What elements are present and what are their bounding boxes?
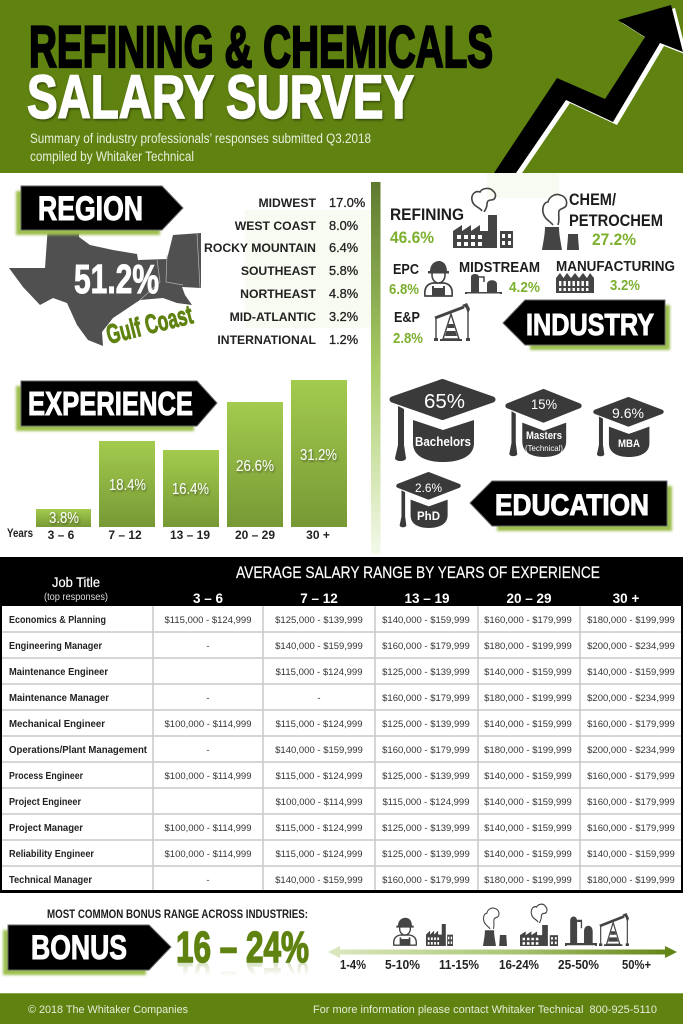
scale labels: 50%+ — [622, 958, 651, 972]
table header: 3 – 6 — [193, 591, 224, 606]
row: project manager: $140,000 - $159,999 — [484, 823, 572, 834]
row: project engineer: $115,000 - $124,999 — [383, 797, 469, 808]
row: maintenance engineer: $140,000 - $159,999 — [484, 667, 572, 678]
panel: experience — [7, 380, 347, 542]
chem / petrochem: CHEM/ — [569, 190, 616, 209]
axis labels: Years — [7, 528, 33, 540]
subtitle: compiled by Whitaker Technical — [30, 149, 194, 164]
mba cap — [595, 399, 662, 457]
row: mechanical engineer: $125,000 - $139,999 — [382, 719, 470, 730]
mba cap: MBA — [618, 438, 640, 450]
row: engineering manager: Engineering Manager — [9, 641, 102, 652]
region list: WEST COAST — [235, 219, 317, 233]
epc: 6.8% — [389, 281, 419, 298]
masters cap — [508, 391, 579, 457]
bar 20-29 — [227, 402, 283, 527]
refining: 46.6% — [390, 228, 434, 247]
row: process engineer: $100,000 - $114,999 — [165, 771, 251, 782]
row: operations plant management: Operations/Plant Management — [9, 745, 148, 756]
epc: EPC — [393, 262, 419, 278]
table header: Job Title — [52, 574, 100, 590]
region list: INTERNATIONAL — [217, 333, 317, 347]
region list: MID-ATLANTIC — [230, 310, 316, 324]
table header: 30 + — [613, 591, 639, 606]
bonus range value: 16 – 24% — [176, 923, 309, 972]
experience badge: EXPERIENCE — [28, 385, 193, 422]
masters cap: Masters — [526, 430, 562, 442]
bachelors cap: 65% — [424, 391, 465, 413]
icon row — [394, 904, 629, 946]
masters cap: (Technical) — [525, 443, 563, 453]
row: mechanical engineer: $115,000 - $124,999 — [276, 719, 362, 730]
row: technical manager — [9, 875, 675, 886]
bonus range value — [176, 923, 309, 1001]
axis labels: 3 – 6 — [48, 528, 75, 542]
row: project manager: $125,000 - $139,999 — [382, 823, 470, 834]
panel: industry — [389, 188, 675, 350]
row: reliability engineer — [9, 849, 675, 860]
region list: NORTHEAST — [240, 287, 317, 301]
e&p: E&P — [394, 310, 420, 326]
table header — [44, 563, 639, 606]
scale labels: 1-4% — [340, 958, 366, 972]
row: maintenance manager: $160,000 - $179,999 — [382, 693, 470, 704]
row: operations plant management: $200,000 - $234,999 — [587, 745, 675, 756]
row: economics and planning: $160,000 - $179,999 — [484, 615, 572, 626]
bar 13-19: 16.4% — [172, 481, 209, 498]
row: project manager: $115,000 - $124,999 — [276, 823, 362, 834]
row: technical manager: $160,000 - $179,999 — [382, 875, 470, 886]
phd cap: 2.6% — [415, 481, 442, 495]
region list: 8.0% — [329, 218, 358, 233]
region list: 17.0% — [329, 195, 365, 210]
row: maintenance engineer: $115,000 - $124,999 — [276, 667, 362, 678]
row: project manager: $160,000 - $179,999 — [587, 823, 675, 834]
row: operations plant management: $160,000 - $179,999 — [382, 745, 470, 756]
manufacturing: 3.2% — [610, 277, 640, 294]
chem / petrochem: PETROCHEM — [569, 211, 663, 230]
panel: bonus — [3, 904, 677, 1001]
chem / petrochem — [542, 190, 663, 250]
title: salary survey: SALARY SURVEY — [27, 63, 414, 131]
row: engineering manager: $140,000 - $159,999 — [275, 641, 363, 652]
row: operations plant management — [9, 745, 675, 756]
row: mechanical engineer: $100,000 - $114,999 — [165, 719, 251, 730]
row: reliability engineer: Reliability Engineer — [9, 849, 94, 860]
row: project engineer — [9, 797, 675, 808]
row: mechanical engineer: $160,000 - $179,999 — [587, 719, 675, 730]
bar 30+: 31.2% — [300, 447, 337, 464]
bar 13-19 — [163, 450, 219, 527]
row: maintenance manager: $180,000 - $199,999 — [484, 693, 572, 704]
gulf coast label: Gulf Coast — [103, 299, 196, 350]
bar 20-29: 26.6% — [236, 458, 274, 475]
row: technical manager: $180,000 - $199,999 — [587, 875, 675, 886]
education badge — [470, 481, 672, 531]
axis labels — [7, 528, 330, 542]
row: economics and planning — [9, 615, 675, 626]
scale labels: 5-10% — [385, 958, 420, 972]
region list: MIDWEST — [258, 196, 317, 210]
table header: 7 – 12 — [300, 591, 338, 606]
table header: 20 – 29 — [506, 591, 552, 606]
centre divider — [371, 182, 380, 554]
row: process engineer: Process Engineer — [9, 771, 83, 782]
row: process engineer — [9, 771, 675, 782]
row: engineering manager: - — [206, 641, 210, 652]
row: economics and planning: Economics & Planning — [9, 615, 106, 626]
bonus badge — [3, 925, 171, 975]
table header: AVERAGE SALARY RANGE BY YEARS OF EXPERIENCE — [236, 563, 600, 582]
chem / petrochem: 27.2% — [592, 230, 636, 249]
bar 3-6: 3.8% — [49, 510, 79, 527]
midstream — [459, 260, 540, 296]
scale labels: 16-24% — [499, 958, 539, 972]
bachelors cap: Bachelors — [415, 434, 471, 449]
region list: ROCKY MOUNTAIN — [204, 241, 316, 255]
region list: 4.8% — [329, 286, 358, 301]
salary table — [0, 557, 683, 893]
midstream: 4.2% — [509, 279, 540, 296]
row: economics and planning: $180,000 - $199,999 — [587, 615, 675, 626]
industry badge — [503, 300, 670, 350]
row: process engineer: $160,000 - $179,999 — [587, 771, 675, 782]
row: maintenance engineer: $125,000 - $139,999 — [382, 667, 470, 678]
row: maintenance manager: - — [206, 693, 210, 704]
row: reliability engineer: $115,000 - $124,999 — [276, 849, 362, 860]
axis labels: 30 + — [306, 528, 330, 542]
footer: For more information please contact Whitaker Technical 800-925-5110 — [313, 1004, 657, 1016]
region badge — [16, 186, 183, 235]
bar 3-6 — [36, 509, 91, 527]
region badge: REGION — [38, 190, 143, 228]
row: operations plant management: $140,000 - $159,999 — [275, 745, 363, 756]
row: technical manager: Technical Manager — [9, 875, 92, 886]
region list: SOUTHEAST — [241, 264, 317, 278]
row: project engineer: $160,000 - $179,999 — [587, 797, 675, 808]
region list: 5.8% — [329, 263, 358, 278]
double-headed scale arrow — [328, 946, 677, 958]
region list: 3.2% — [329, 309, 358, 324]
industry badge: INDUSTRY — [526, 307, 654, 342]
row: engineering manager: $200,000 - $234,999 — [587, 641, 675, 652]
scale labels — [340, 958, 651, 972]
table header: 13 – 19 — [404, 591, 450, 606]
bar chart — [7, 380, 347, 542]
row: process engineer: $125,000 - $139,999 — [382, 771, 470, 782]
bonus badge: BONUS — [31, 929, 127, 967]
row: engineering manager: $180,000 - $199,999 — [484, 641, 572, 652]
bar 30+ — [291, 380, 347, 527]
icon: rising arrow — [494, 5, 683, 176]
refining — [390, 188, 513, 248]
row: maintenance manager: - — [317, 693, 321, 704]
row: maintenance engineer: Maintenance Engineer — [9, 667, 108, 678]
midstream: MIDSTREAM — [459, 260, 540, 276]
epc — [389, 261, 452, 298]
bar 7-12: 18.4% — [109, 477, 146, 494]
row: engineering manager: $160,000 - $179,999 — [382, 641, 470, 652]
row: economics and planning: $125,000 - $139,999 — [275, 615, 363, 626]
region list: 6.4% — [329, 240, 358, 255]
gulf coast map — [9, 225, 201, 346]
row: reliability engineer: $140,000 - $159,999 — [484, 849, 572, 860]
region list — [204, 195, 365, 347]
pale background patches — [245, 173, 559, 328]
education badge: EDUCATION — [495, 489, 649, 522]
mba cap: 9.6% — [612, 405, 644, 421]
row: project manager: Project Manager — [9, 823, 83, 834]
row: project engineer: $100,000 - $114,999 — [276, 797, 362, 808]
footer: © 2018 The Whitaker Companies — [28, 1004, 188, 1016]
bonus heading: MOST COMMON BONUS RANGE ACROSS INDUSTRIES: — [47, 909, 308, 921]
row: reliability engineer: $100,000 - $114,999 — [165, 849, 251, 860]
row: process engineer: $115,000 - $124,999 — [276, 771, 362, 782]
row: maintenance manager: $200,000 - $234,999 — [587, 693, 675, 704]
axis labels: 20 – 29 — [235, 528, 275, 542]
row: project manager: $100,000 - $114,999 — [165, 823, 251, 834]
panel: education — [392, 382, 672, 531]
axis labels: 13 – 19 — [170, 528, 210, 542]
gulf coast share: 51.2% — [74, 256, 159, 302]
footer — [0, 993, 683, 1024]
row: process engineer: $140,000 - $159,999 — [484, 771, 572, 782]
row: operations plant management: $180,000 - $199,999 — [484, 745, 572, 756]
header banner — [0, 0, 683, 176]
row: project engineer: Project Engineer — [9, 797, 81, 808]
masters cap: 15% — [531, 396, 557, 412]
axis labels: 7 – 12 — [108, 528, 142, 542]
subtitle: Summary of industry professionals’ responses submitted Q3.2018 — [30, 131, 371, 146]
bar 7-12 — [99, 441, 155, 527]
row: mechanical engineer: Mechanical Engineer — [9, 719, 105, 730]
row: economics and planning: $140,000 - $159,999 — [382, 615, 470, 626]
table header: (top responses) — [44, 592, 108, 603]
region list: 1.2% — [329, 332, 358, 347]
row: technical manager: $140,000 - $159,999 — [275, 875, 363, 886]
experience badge — [16, 381, 217, 431]
row: technical manager: $180,000 - $199,999 — [484, 875, 572, 886]
row: technical manager: - — [206, 875, 210, 886]
subtitle — [30, 131, 371, 164]
row: project engineer: $140,000 - $159,999 — [484, 797, 572, 808]
row: mechanical engineer — [9, 719, 675, 730]
row: maintenance manager: Maintenance Manager — [9, 693, 109, 704]
row: maintenance manager — [9, 693, 675, 704]
phd cap — [398, 474, 459, 528]
row: engineering manager — [9, 641, 675, 652]
row: mechanical engineer: $140,000 - $159,999 — [484, 719, 572, 730]
scale labels: 25-50% — [558, 958, 599, 972]
row: operations plant management: - — [206, 745, 210, 756]
e&p: 2.8% — [393, 330, 423, 347]
row: reliability engineer: $140,000 - $159,999 — [587, 849, 675, 860]
manufacturing — [556, 259, 675, 294]
bonus range value: 16 – 24% — [176, 952, 309, 1001]
bachelors cap — [392, 382, 492, 462]
row: maintenance engineer: $140,000 - $159,999 — [587, 667, 675, 678]
e&p — [393, 303, 470, 347]
phd cap: PhD — [417, 509, 440, 523]
manufacturing: MANUFACTURING — [556, 259, 675, 275]
refining: REFINING — [390, 205, 464, 224]
row: maintenance engineer — [9, 667, 675, 678]
row: reliability engineer: $125,000 - $139,999 — [382, 849, 470, 860]
row: project manager — [9, 823, 675, 834]
panel: region — [9, 186, 365, 350]
row: economics and planning: $115,000 - $124,999 — [165, 615, 251, 626]
scale labels: 11-15% — [439, 958, 479, 972]
